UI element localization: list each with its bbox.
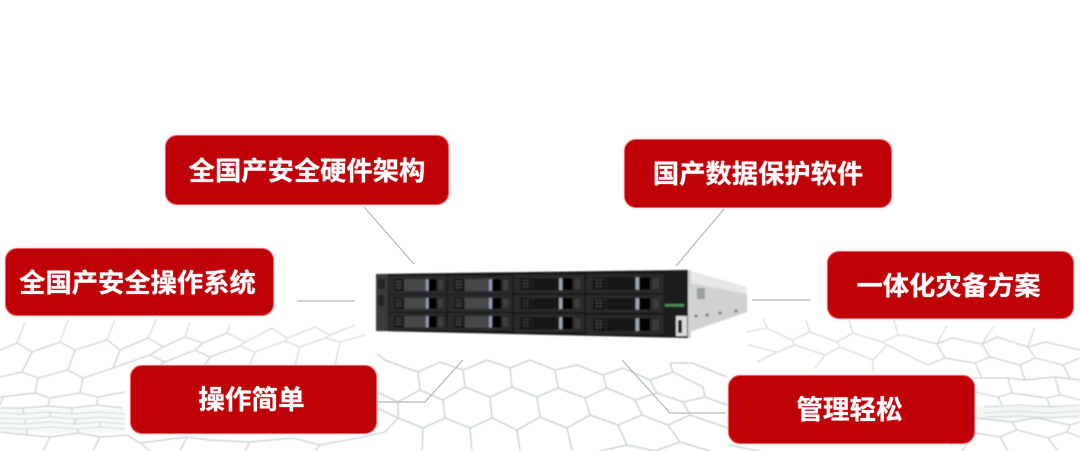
callout: simple operation: 操作简单 [198,385,305,415]
right rows [728,336,1080,451]
callout: nationwide secure operating system: 全国产安全操作系统 [19,268,256,298]
callout: domestic data protection software: 国产数据保护软件 [653,159,863,189]
callout: integrated disaster recovery solution: 一体化灾备方案 [856,271,1041,301]
callout: simple operation [130,365,377,434]
callout: nationwide secure hardware architecture [165,135,449,205]
compressed mesh strips [0,405,1080,433]
callout: integrated disaster recovery solution [827,251,1074,319]
center rows [377,354,728,451]
callout: easy management [728,375,975,444]
far rows, faded [17,318,1035,372]
callout: nationwide secure operating system [5,248,274,316]
left rows [0,333,398,451]
drive bays [389,274,663,334]
callout: domestic data protection software [624,139,892,208]
callout: easy management: 管理轻松 [796,395,903,425]
server front face [376,270,691,338]
callout: nationwide secure hardware architecture: 全国产安全硬件架构 [189,156,425,186]
server side panel [690,271,747,332]
